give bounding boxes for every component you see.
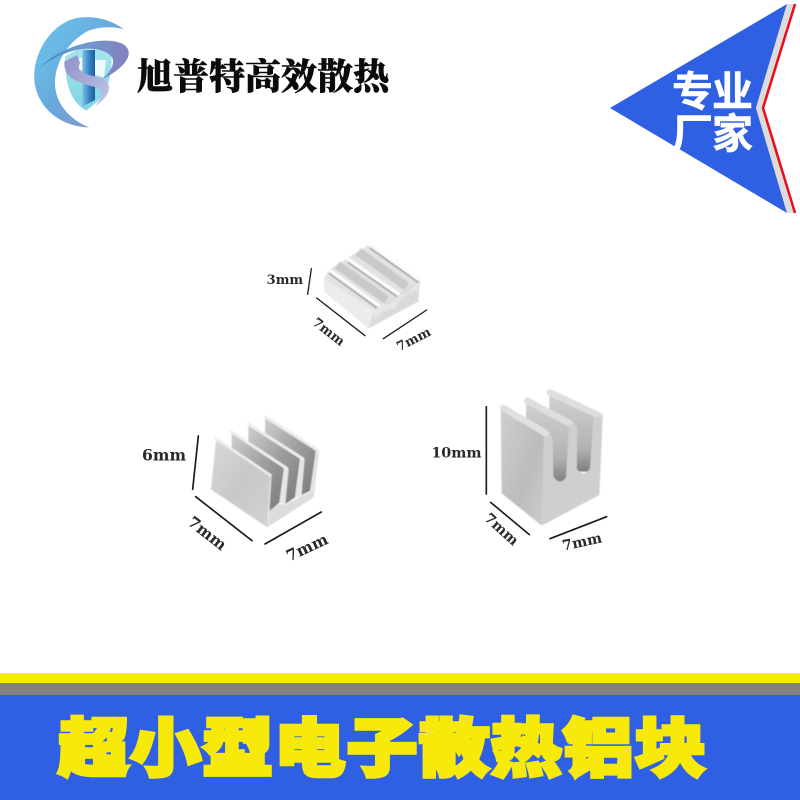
badge text <box>672 69 753 157</box>
badge grey edge <box>756 4 793 213</box>
sink 10mm body <box>501 393 603 526</box>
logo central pillar <box>82 50 95 107</box>
logo outer crescent <box>34 17 124 127</box>
middle plate inner face <box>526 402 570 482</box>
badge red edge <box>763 4 795 213</box>
sink 3mm left dimension <box>309 298 365 350</box>
bottom yellow stripe <box>0 673 800 683</box>
rear plate <box>265 417 316 495</box>
sink 3mm left dimension: 7mm <box>309 315 347 350</box>
heat sink 6mm <box>142 417 331 565</box>
sink 10mm left dimension <box>481 502 529 549</box>
sink 6mm right dimension: 7mm <box>283 529 331 565</box>
sink 10mm right dimension: 7mm <box>561 531 604 555</box>
sink 3mm height label <box>267 269 311 294</box>
sink 6mm height label <box>142 436 198 489</box>
logo S band <box>64 55 109 106</box>
badge text: 厂家 <box>672 111 753 157</box>
bottom blue banner <box>0 695 800 800</box>
base strip <box>267 491 314 527</box>
brand title: 旭普特高效散热 <box>137 56 393 97</box>
sink 10mm height label: 10mm <box>431 445 482 461</box>
badge blue arrow <box>610 4 787 213</box>
sink 10mm left dimension: 7mm <box>481 510 521 549</box>
sink 6mm height label: 6mm <box>142 446 186 465</box>
sink 6mm right dimension <box>265 512 331 565</box>
sink 3mm right dimension <box>383 310 434 355</box>
badge: professional manufacturer <box>610 4 795 213</box>
sink 6mm body <box>211 417 319 527</box>
logo <box>34 17 129 127</box>
front plate <box>211 439 271 527</box>
sink 3mm body <box>324 244 420 328</box>
heat sink 3mm <box>267 244 434 355</box>
sink 10mm right dimension <box>550 517 607 555</box>
rear plate inner face <box>549 393 597 472</box>
logo inner white gaps <box>74 57 106 77</box>
sink 3mm height label: 3mm <box>267 273 303 288</box>
bottom grey stripe <box>0 683 800 695</box>
banner headline: 超小型电子散热铝块 <box>58 714 706 785</box>
second plate <box>232 433 284 511</box>
badge text: 专业 <box>672 69 753 115</box>
sink 6mm left dimension: 7mm <box>184 512 231 555</box>
logo top swoosh <box>40 41 129 79</box>
sink 3mm right dimension: 7mm <box>394 325 434 355</box>
end profile with U slots <box>542 415 603 526</box>
third plate <box>248 425 300 504</box>
sink 10mm height label <box>431 407 486 494</box>
heat sink 10mm <box>431 393 607 555</box>
logo shield <box>65 48 112 111</box>
front plate <box>501 408 544 526</box>
sink 6mm left dimension <box>184 497 252 555</box>
